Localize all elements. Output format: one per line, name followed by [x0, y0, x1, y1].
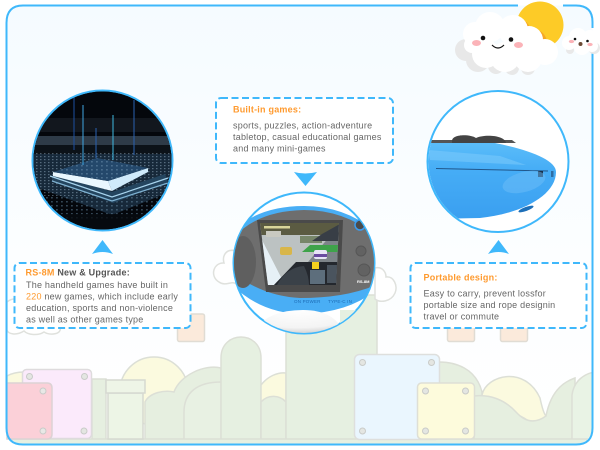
icon: outline clouds — [7, 250, 396, 335]
callout: RS-8M New & Upgrade: 220 new games, which include early — [26, 292, 178, 302]
background: game scenery — [0, 295, 600, 447]
callout: RS-8M New & Upgrade — [14, 263, 190, 328]
image: blue console side view in circle — [426, 91, 568, 232]
icon: pink block — [22, 370, 92, 438]
icon: green pipe — [106, 380, 145, 439]
callout: built-in games: Built-in games: — [233, 104, 301, 114]
image: game console screen in circle: TYPE-C IN — [328, 299, 352, 304]
arrow: down to console — [294, 172, 317, 186]
icon: sun — [518, 2, 564, 44]
callout: RS-8M New & Upgrade: as well as other games type — [26, 314, 144, 324]
icon: yellow block — [418, 383, 474, 439]
arrow: up to chip — [92, 240, 113, 254]
icon: red block — [7, 383, 52, 439]
callout: portable design: Easy to carry, prevent lossfor — [424, 288, 546, 298]
icon: small cloud — [562, 28, 600, 55]
icon: blue block — [354, 354, 440, 440]
image: processor chip in circle — [30, 90, 175, 235]
callout: built-in games: and many mini-games — [233, 144, 326, 154]
callout: portable design: portable size and rope designin — [424, 300, 555, 310]
callout: built-in games — [216, 98, 393, 163]
icon: question blocks — [178, 314, 528, 342]
callout: built-in games: tabletop, casual educational games — [233, 132, 382, 142]
image: game console screen in circle: RS-8M — [357, 279, 370, 284]
callout: RS-8M New & Upgrade: RS-8M New & Upgrade: — [26, 268, 130, 278]
image: game console screen in circle: ON POWER — [294, 299, 321, 304]
callout: RS-8M New & Upgrade: The handheld games have built in — [26, 280, 168, 290]
callout: portable design — [410, 263, 586, 328]
image: game console screen in circle — [230, 192, 380, 340]
callout: portable design: travel or commute — [424, 312, 499, 322]
icon: large smiling cloud — [455, 12, 558, 75]
callout: built-in games: sports, puzzles, action-adventure — [233, 120, 372, 130]
callout: RS-8M New & Upgrade: education, sports and non-violence — [26, 303, 173, 313]
callout: portable design: Portable design: — [424, 272, 498, 282]
arrow: up to side view — [488, 240, 509, 254]
